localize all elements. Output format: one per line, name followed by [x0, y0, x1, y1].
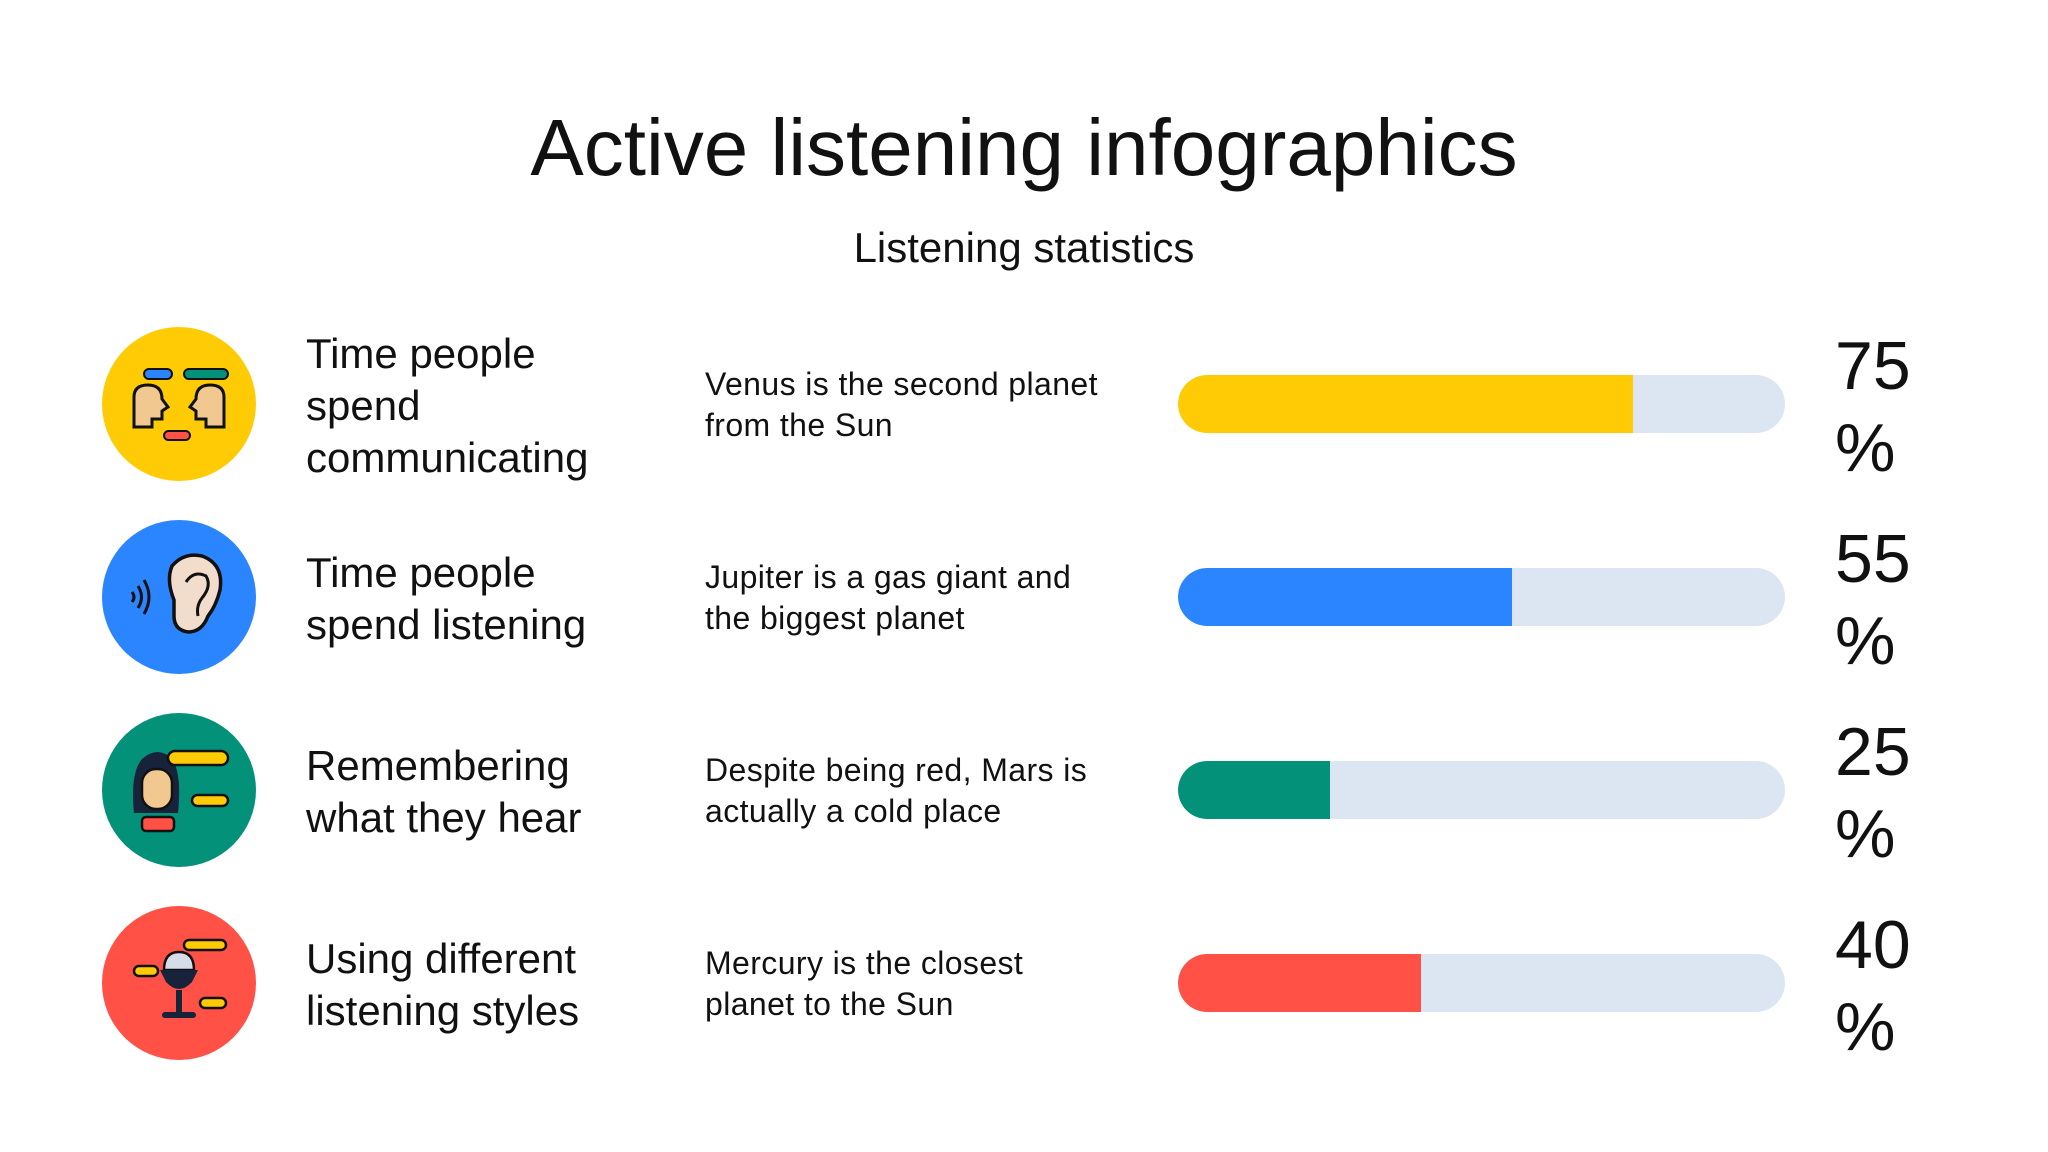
percent 3: %: [1835, 796, 1895, 872]
percent 2: %: [1835, 603, 1895, 679]
label 3: Remembering: [306, 742, 570, 789]
label 2: [306, 549, 586, 648]
label 1: [306, 330, 588, 481]
percent 4: %: [1835, 989, 1895, 1065]
label 4: [306, 935, 579, 1034]
description 2: [705, 559, 1071, 636]
label 1: spend: [306, 382, 420, 429]
description 1: [705, 366, 1098, 443]
percent 1: [1835, 328, 1911, 486]
label 3: what they hear: [306, 794, 582, 841]
icon: microphone: [102, 906, 256, 1060]
description 4: Mercury is the closest: [705, 945, 1023, 981]
description 2: Jupiter is a gas giant and: [705, 559, 1071, 595]
percent 3: [1835, 714, 1911, 872]
label 1: Time people: [306, 330, 536, 377]
label 4: Using different: [306, 935, 576, 982]
bar 3: [1178, 761, 1785, 819]
description 4: [705, 945, 1023, 1022]
percent 2: 55: [1835, 521, 1911, 597]
percent 1: 75: [1835, 328, 1911, 404]
bar 1: [1178, 375, 1785, 433]
bar 2: [1178, 568, 1785, 626]
percent 3: 25: [1835, 714, 1911, 790]
percent 4: 40: [1835, 907, 1911, 983]
icon: two heads communicating: [102, 327, 256, 481]
label 4: listening styles: [306, 987, 579, 1034]
percent 2: [1835, 521, 1911, 679]
percent 4: [1835, 907, 1911, 1065]
title: Active listening infographics: [530, 103, 1518, 192]
description 4: planet to the Sun: [705, 986, 954, 1022]
subtitle: Listening statistics: [854, 224, 1194, 271]
label 3: [306, 742, 582, 841]
label 2: Time people: [306, 549, 536, 596]
description 2: the biggest planet: [705, 600, 965, 636]
description 3: actually a cold place: [705, 793, 1002, 829]
icon: person remembering: [102, 713, 256, 867]
percent 1: %: [1835, 410, 1895, 486]
label 2: spend listening: [306, 601, 586, 648]
icon: ear: [102, 520, 256, 674]
label 1: communicating: [306, 434, 588, 481]
description 3: Despite being red, Mars is: [705, 752, 1087, 788]
description 3: [705, 752, 1087, 829]
bar 4: [1178, 954, 1785, 1012]
description 1: Venus is the second planet: [705, 366, 1098, 402]
description 1: from the Sun: [705, 407, 893, 443]
